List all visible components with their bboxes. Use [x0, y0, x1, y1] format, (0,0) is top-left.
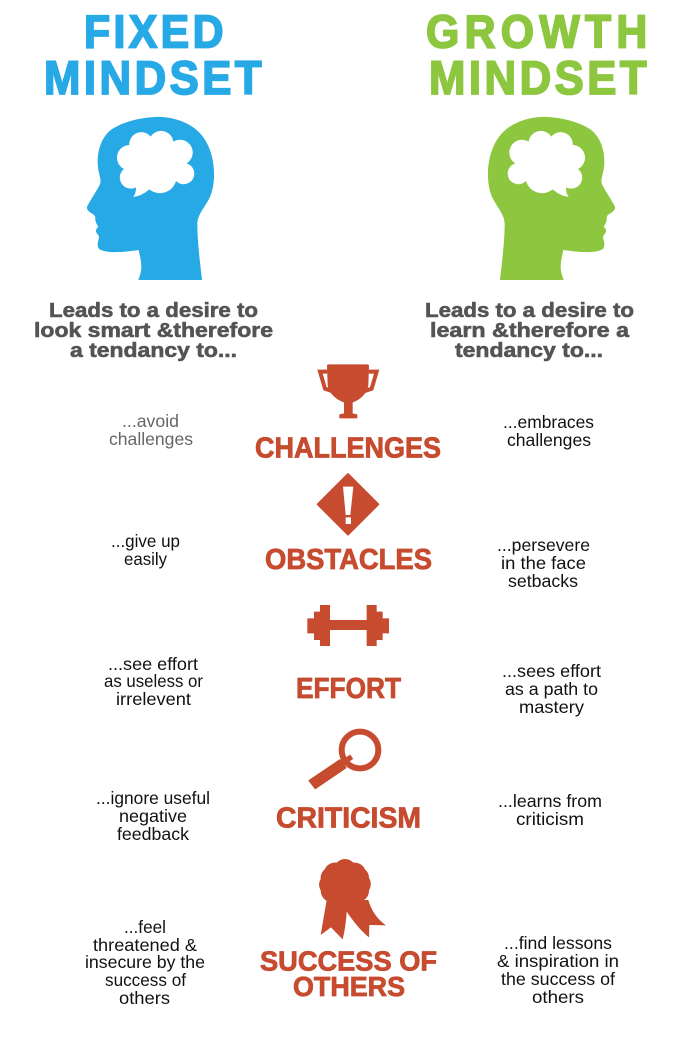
text: threatened: ...feel	[124, 917, 166, 937]
text: see effort useless: as useless or	[104, 671, 203, 691]
text: threatened: insecure by the	[85, 952, 205, 972]
text: learns from criticism: criticism	[516, 809, 584, 829]
subtitle: growth: learn &therefore a	[430, 319, 630, 342]
title: growth mindset	[426, 7, 647, 104]
text: sees effort mastery: ...sees effort	[502, 661, 601, 681]
text: give up easily	[111, 531, 180, 569]
text: give up easily: ...give up	[111, 531, 180, 551]
subtitle: fixed	[34, 299, 273, 362]
text: persevere: ...persevere	[497, 535, 590, 555]
subtitle: growth: Leads to a desire to	[425, 299, 634, 322]
subtitle: fixed: Leads to a desire to	[49, 299, 258, 322]
text: embraces challenges: challenges	[507, 430, 591, 450]
subtitle: growth	[425, 299, 634, 362]
text: give up easily: easily	[124, 549, 167, 569]
text: avoid challenges	[109, 411, 193, 449]
text: sees effort mastery: as a path to	[505, 679, 598, 699]
text: persevere: setbacks	[508, 571, 578, 591]
heading: challenges: CHALLENGES	[255, 432, 441, 464]
icon: trophy	[320, 364, 377, 418]
text: ignore feedback: ...ignore useful	[96, 788, 210, 808]
text: learns from criticism: ...learns from	[498, 791, 602, 811]
text: ignore feedback	[96, 788, 210, 844]
text: threatened	[85, 917, 205, 1008]
icon: green head	[488, 117, 615, 280]
icon: dumbbell	[307, 605, 389, 646]
text: avoid challenges: challenges	[109, 429, 193, 449]
text: sees effort mastery: mastery	[519, 697, 584, 717]
text: find lessons: ...find lessons	[504, 933, 612, 953]
heading: obstacles: OBSTACLES	[265, 544, 432, 576]
text: embraces challenges: ...embraces	[503, 412, 594, 432]
subtitle: growth: tendancy to...	[455, 339, 603, 362]
icon: blue head	[87, 117, 214, 280]
text: ignore feedback: feedback	[117, 824, 189, 844]
text: learns from criticism	[498, 791, 602, 829]
text: threatened: threatened &	[93, 935, 197, 955]
text: embraces challenges	[503, 412, 594, 450]
text: persevere: in the face	[501, 553, 586, 573]
text: find lessons	[497, 933, 619, 1007]
title: growth mindset: GROWTH	[426, 7, 647, 58]
text: see effort useless	[104, 654, 203, 709]
title: growth mindset: MINDSET	[429, 52, 647, 104]
text: ignore feedback: negative	[119, 806, 187, 826]
title: fixed mindset	[44, 7, 262, 104]
text: find lessons: & inspiration in	[497, 951, 619, 971]
title: fixed mindset: FIXED	[84, 7, 224, 58]
title: fixed mindset: MINDSET	[44, 52, 262, 104]
text: see effort useless: ...see effort	[108, 654, 198, 674]
text: sees effort mastery	[502, 661, 601, 717]
text: avoid challenges: ...avoid	[122, 411, 179, 431]
text: see effort useless: irrelevent	[116, 689, 191, 709]
text: find lessons: the success of	[501, 969, 615, 989]
text: threatened: success of	[105, 970, 186, 990]
heading: effort: EFFORT	[296, 673, 401, 705]
heading: criticism: CRITICISM	[276, 802, 421, 834]
icon: award ribbon	[319, 859, 386, 939]
heading: success of others: SUCCESS OF	[260, 946, 437, 976]
icon: magnifying glass	[309, 732, 378, 788]
text: persevere	[497, 535, 590, 591]
subtitle: fixed: look smart &therefore	[34, 319, 273, 342]
heading: success of others: OTHERS	[293, 971, 405, 1002]
text: find lessons: others	[532, 987, 584, 1007]
text: threatened: others	[119, 988, 170, 1008]
subtitle: fixed: a tendancy to...	[70, 339, 237, 362]
icon: warning diamond	[318, 474, 378, 534]
heading: success of others	[260, 946, 437, 1002]
